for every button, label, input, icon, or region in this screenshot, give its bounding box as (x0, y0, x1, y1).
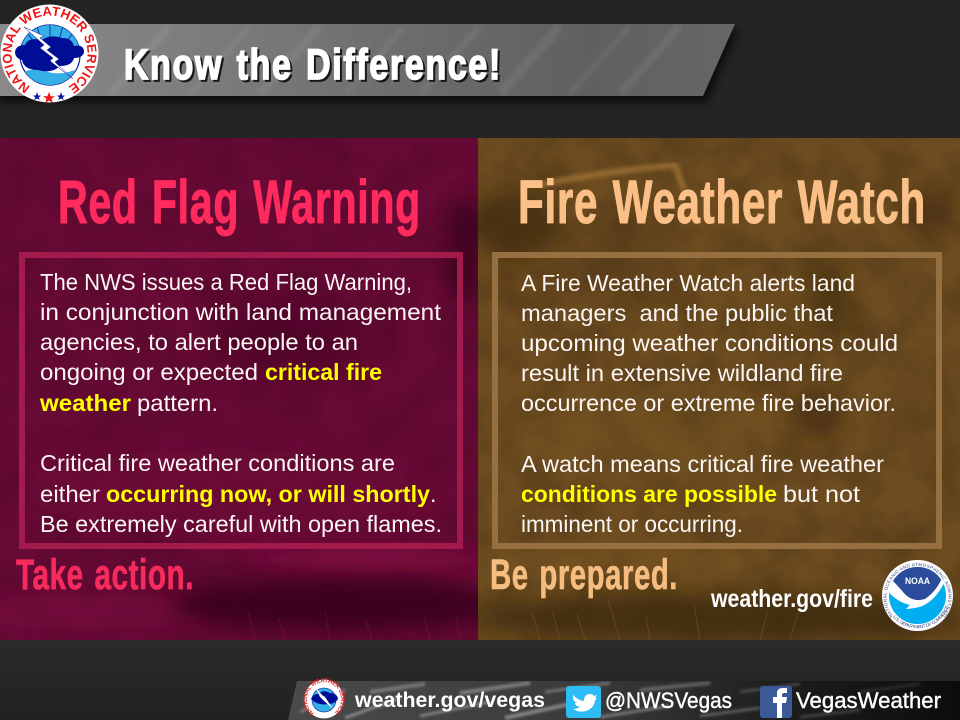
text block: fire weather paragraph two: imminent or occurring. (521, 511, 743, 537)
tagline: Take action: Take action. (16, 551, 194, 599)
text block: red flag paragraph two: either (40, 481, 100, 507)
handle: @NWSVegas: @NWSVegas (605, 688, 732, 713)
title text: Know the Difference! (124, 41, 502, 89)
text block: red flag paragraph one: in conjunction with land management (40, 299, 442, 325)
text block: fire weather paragraph one: A Fire Weather Watch alerts land (521, 270, 855, 296)
text block: red flag paragraph one: critical fire (265, 359, 382, 385)
text block: red flag paragraph one: agencies, to alert people to an (40, 329, 358, 355)
text box frame: red flag (22, 255, 460, 546)
icon: NOAA logo: NATIONAL OCEANIC AND ATMOSPHERIC ADMINISTRATION (884, 562, 952, 618)
bottom background band (0, 640, 960, 720)
text block: fire weather paragraph one (521, 270, 898, 416)
title banner (0, 24, 739, 103)
icon: NOAA logo: NOAA (905, 576, 930, 587)
text block: fire weather paragraph two (521, 451, 884, 537)
panel: Red Flag Warning (0, 138, 510, 640)
text block: red flag paragraph one: The NWS issues a Red Flag Warning, (40, 269, 412, 295)
handle: VegasWeather: VegasWeather (796, 688, 941, 713)
heading: Red Flag Warning: Red Flag Warning (58, 168, 421, 236)
text block: fire weather paragraph one: upcoming weather conditions could (521, 330, 898, 356)
icon: National Weather Service logo: NATIONAL WEATHER SERVICE (2, 6, 97, 94)
link: weather.gov/fire: weather.gov/fire (710, 585, 873, 613)
text block: red flag paragraph one (39, 269, 442, 416)
icon: Twitter (566, 686, 601, 718)
title text: Know the Difference! (126, 43, 504, 91)
panel: Fire Weather Watch (478, 138, 960, 640)
tagline: Be prepared: Be prepared. (490, 551, 678, 599)
text block: red flag paragraph one: ongoing or expected (40, 359, 258, 385)
text block: red flag paragraph one: weather (39, 390, 131, 416)
link: weather.gov/vegas: weather.gov/vegas (354, 689, 545, 712)
icon: NOAA logo (882, 560, 953, 631)
text block: red flag paragraph one: pattern. (137, 390, 218, 416)
text block: fire weather paragraph one: occurrence or extreme fire behavior. (521, 390, 896, 416)
text block: red flag paragraph two: . (430, 481, 436, 507)
text box frame: fire weather (495, 255, 939, 546)
text block: fire weather paragraph two: A watch means critical fire weather (521, 451, 884, 477)
text block: red flag paragraph two: occurring now, or will shortly (106, 481, 430, 507)
icon: NOAA logo: U.S. DEPARTMENT OF COMMERCE (893, 606, 948, 628)
icon: Facebook (760, 686, 792, 718)
text block: fire weather paragraph one: managers and the public that (521, 300, 834, 326)
text block: red flag paragraph two: Be extremely careful with open flames. (40, 511, 442, 537)
footer strip (288, 678, 960, 720)
text block: fire weather paragraph two: conditions are possible (521, 481, 777, 507)
text block: red flag paragraph two (40, 450, 442, 537)
text block: fire weather paragraph two: but not (783, 481, 861, 507)
text block: red flag paragraph two: Critical fire weather conditions are (40, 450, 395, 476)
text block: fire weather paragraph one: result in extensive wildland fire (521, 360, 843, 386)
icon: small NWS logo: NATIONAL WEATHER SERVICE (302, 678, 346, 716)
